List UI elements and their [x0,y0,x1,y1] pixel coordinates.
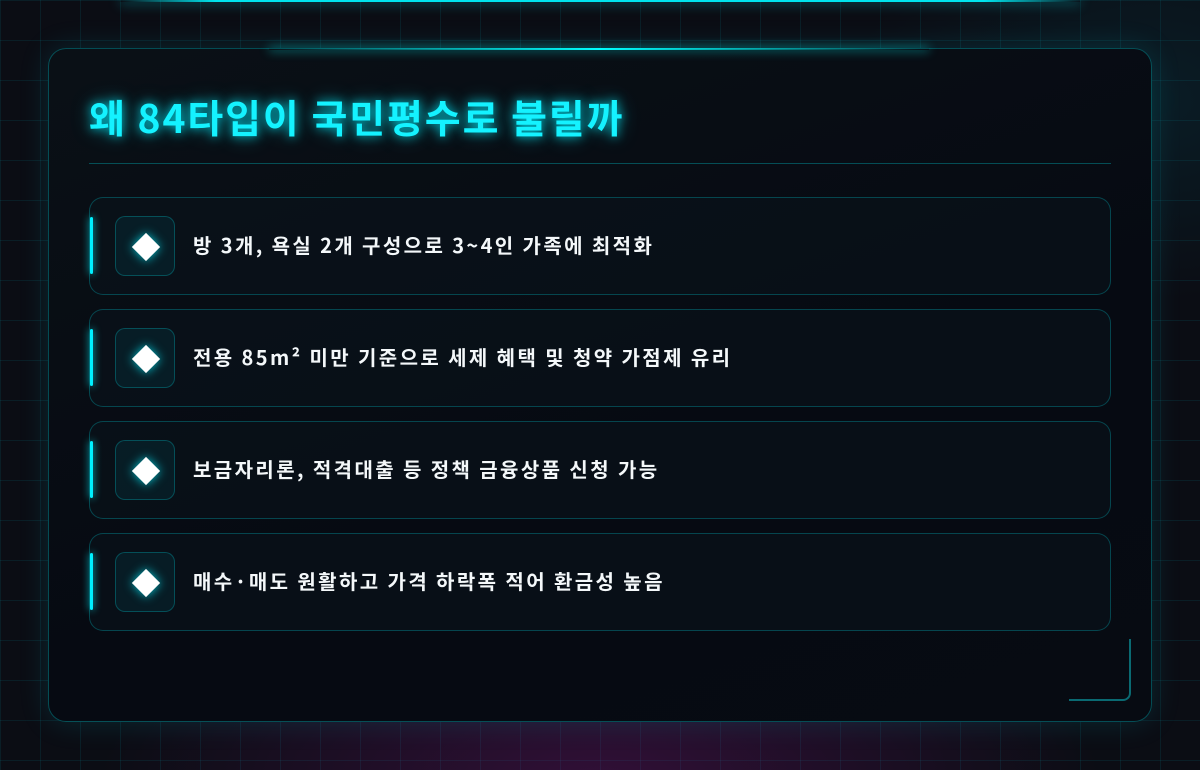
item 1 [89,197,1111,295]
title: 왜 84타입이 국민평수로 불릴까 [89,89,624,145]
text 3: 보금자리론, 적격대출 등 정책 금융상품 신청 가능 [193,454,660,483]
icon: diamond [115,552,175,612]
text 1: 방 3개, 욕실 2개 구성으로 3~4인 가족에 최적화 [193,230,654,259]
item 2 [89,309,1111,407]
icon: diamond [115,216,175,276]
text 2: 전용 85m² 미만 기준으로 세제 혜택 및 청약 가점제 유리 [193,342,732,371]
corner bracket [1069,639,1131,701]
item 3 [89,421,1111,519]
icon: diamond [115,328,175,388]
text 4: 매수·매도 원활하고 가격 하락폭 적어 환금성 높음 [193,566,665,595]
item 4 [89,533,1111,631]
icon: diamond [115,440,175,500]
